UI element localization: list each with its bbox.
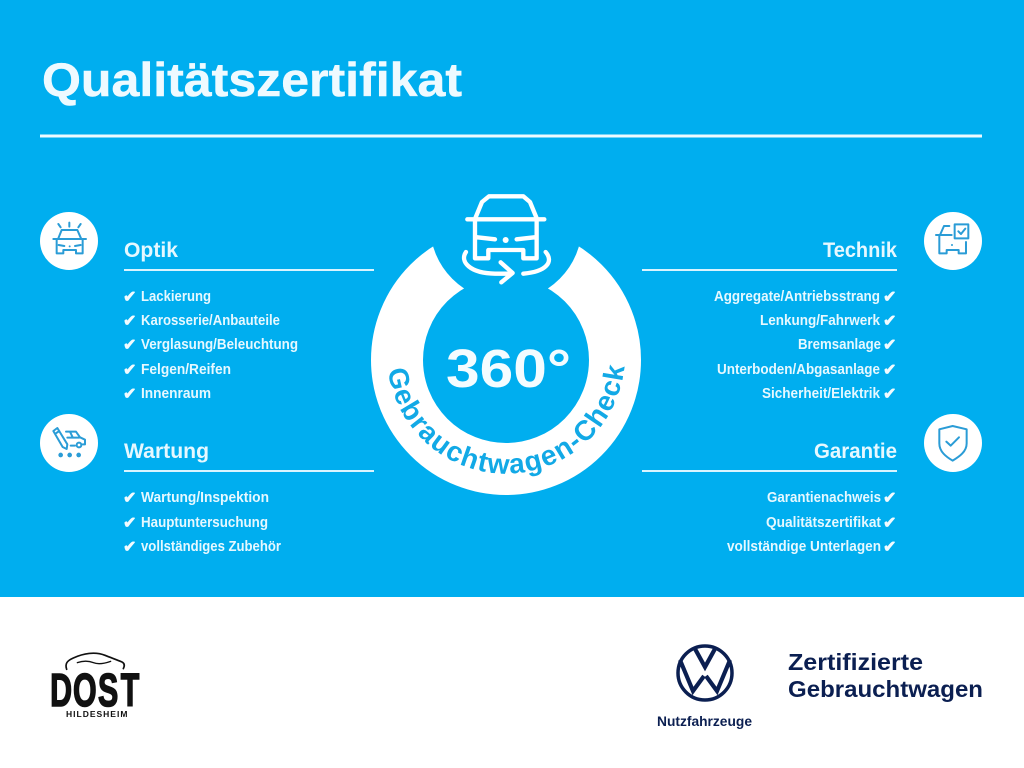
heading: Technik: Technik <box>823 239 897 262</box>
heading: Garantie: Garantie <box>814 440 897 463</box>
title: Qualitätszertifikat <box>42 53 462 106</box>
list: Wartung: Wartung/Inspektion <box>141 490 269 506</box>
list: Wartung: ✔ <box>123 537 136 556</box>
list: Technik: ✔ <box>883 287 896 306</box>
list: Garantie: Qualitätszertifikat <box>766 515 881 531</box>
list: Technik <box>714 287 896 403</box>
text: Zertifizierte Gebrauchtwagen: Zertifizierte <box>788 649 923 675</box>
list: Garantie <box>727 488 896 556</box>
icon: car with rotation arrow <box>464 196 549 282</box>
list: Optik: Lackierung <box>141 289 211 305</box>
panel: Wartung <box>123 440 374 556</box>
list: Optik: ✔ <box>123 287 136 306</box>
list: Optik: ✔ <box>123 335 136 354</box>
list: Garantie: Garantienachweis <box>767 490 881 506</box>
logo: Volkswagen Nutzfahrzeuge <box>657 646 752 729</box>
list: Garantie: vollständige Unterlagen <box>727 539 881 555</box>
list: Optik: ✔ <box>123 384 136 403</box>
list: Technik: Unterboden/Abgasanlage <box>717 362 880 378</box>
list: Wartung <box>123 488 281 556</box>
list: Wartung: ✔ <box>123 513 136 532</box>
icon: wartung pencil and van <box>40 414 98 472</box>
list: Technik: ✔ <box>883 360 896 379</box>
list: Optik: Karosserie/Anbauteile <box>141 313 280 329</box>
list: Garantie: ✔ <box>883 537 896 556</box>
panel: Technik <box>642 239 897 403</box>
text: Zertifizierte Gebrauchtwagen: Gebrauchtwagen <box>788 676 983 702</box>
list: Optik: ✔ <box>123 311 136 330</box>
ring label: Gebrauchtwagen-Check <box>389 364 625 476</box>
list: Optik: Verglasung/Beleuchtung <box>141 337 298 353</box>
icon: VW roundel <box>678 646 732 700</box>
list: Garantie: ✔ <box>883 488 896 507</box>
list: Garantie: ✔ <box>883 513 896 532</box>
list: Optik: Innenraum <box>141 386 211 402</box>
list: Optik <box>123 287 298 403</box>
list: Technik: Sicherheit/Elektrik <box>762 386 881 402</box>
list: Optik: ✔ <box>123 360 136 379</box>
logo: DOST Hildesheim: HILDESHEIM <box>66 709 128 719</box>
panel: Garantie <box>642 440 897 556</box>
list: Technik: ✔ <box>883 335 896 354</box>
logo: DOST Hildesheim: DOST <box>50 666 139 717</box>
icon: optik car <box>40 212 98 270</box>
icon: car outline <box>66 653 124 669</box>
list: Wartung: Hauptuntersuchung <box>141 515 268 531</box>
list: Wartung: vollständiges Zubehör <box>141 539 281 555</box>
list: Technik: Aggregate/Antriebsstrang <box>714 289 880 305</box>
icon: technik car with checkbox <box>924 212 982 270</box>
text: Zertifizierte Gebrauchtwagen <box>788 649 983 702</box>
icon: garantie shield <box>924 414 982 472</box>
heading: Wartung: Wartung <box>124 440 209 463</box>
list: Technik: Lenkung/Fahrwerk <box>760 313 881 329</box>
list: Optik: Felgen/Reifen <box>141 362 231 378</box>
list: Wartung: ✔ <box>123 488 136 507</box>
chart: 360 degree ring <box>371 194 641 495</box>
list: Technik: ✔ <box>883 384 896 403</box>
list: Technik: ✔ <box>883 311 896 330</box>
panel: Optik <box>123 239 374 403</box>
list: Technik: Bremsanlage <box>798 337 881 353</box>
logo: Volkswagen Nutzfahrzeuge: Nutzfahrzeuge <box>657 713 752 729</box>
360 degree figure: 360° <box>446 339 571 399</box>
heading: Optik: Optik <box>124 239 178 262</box>
